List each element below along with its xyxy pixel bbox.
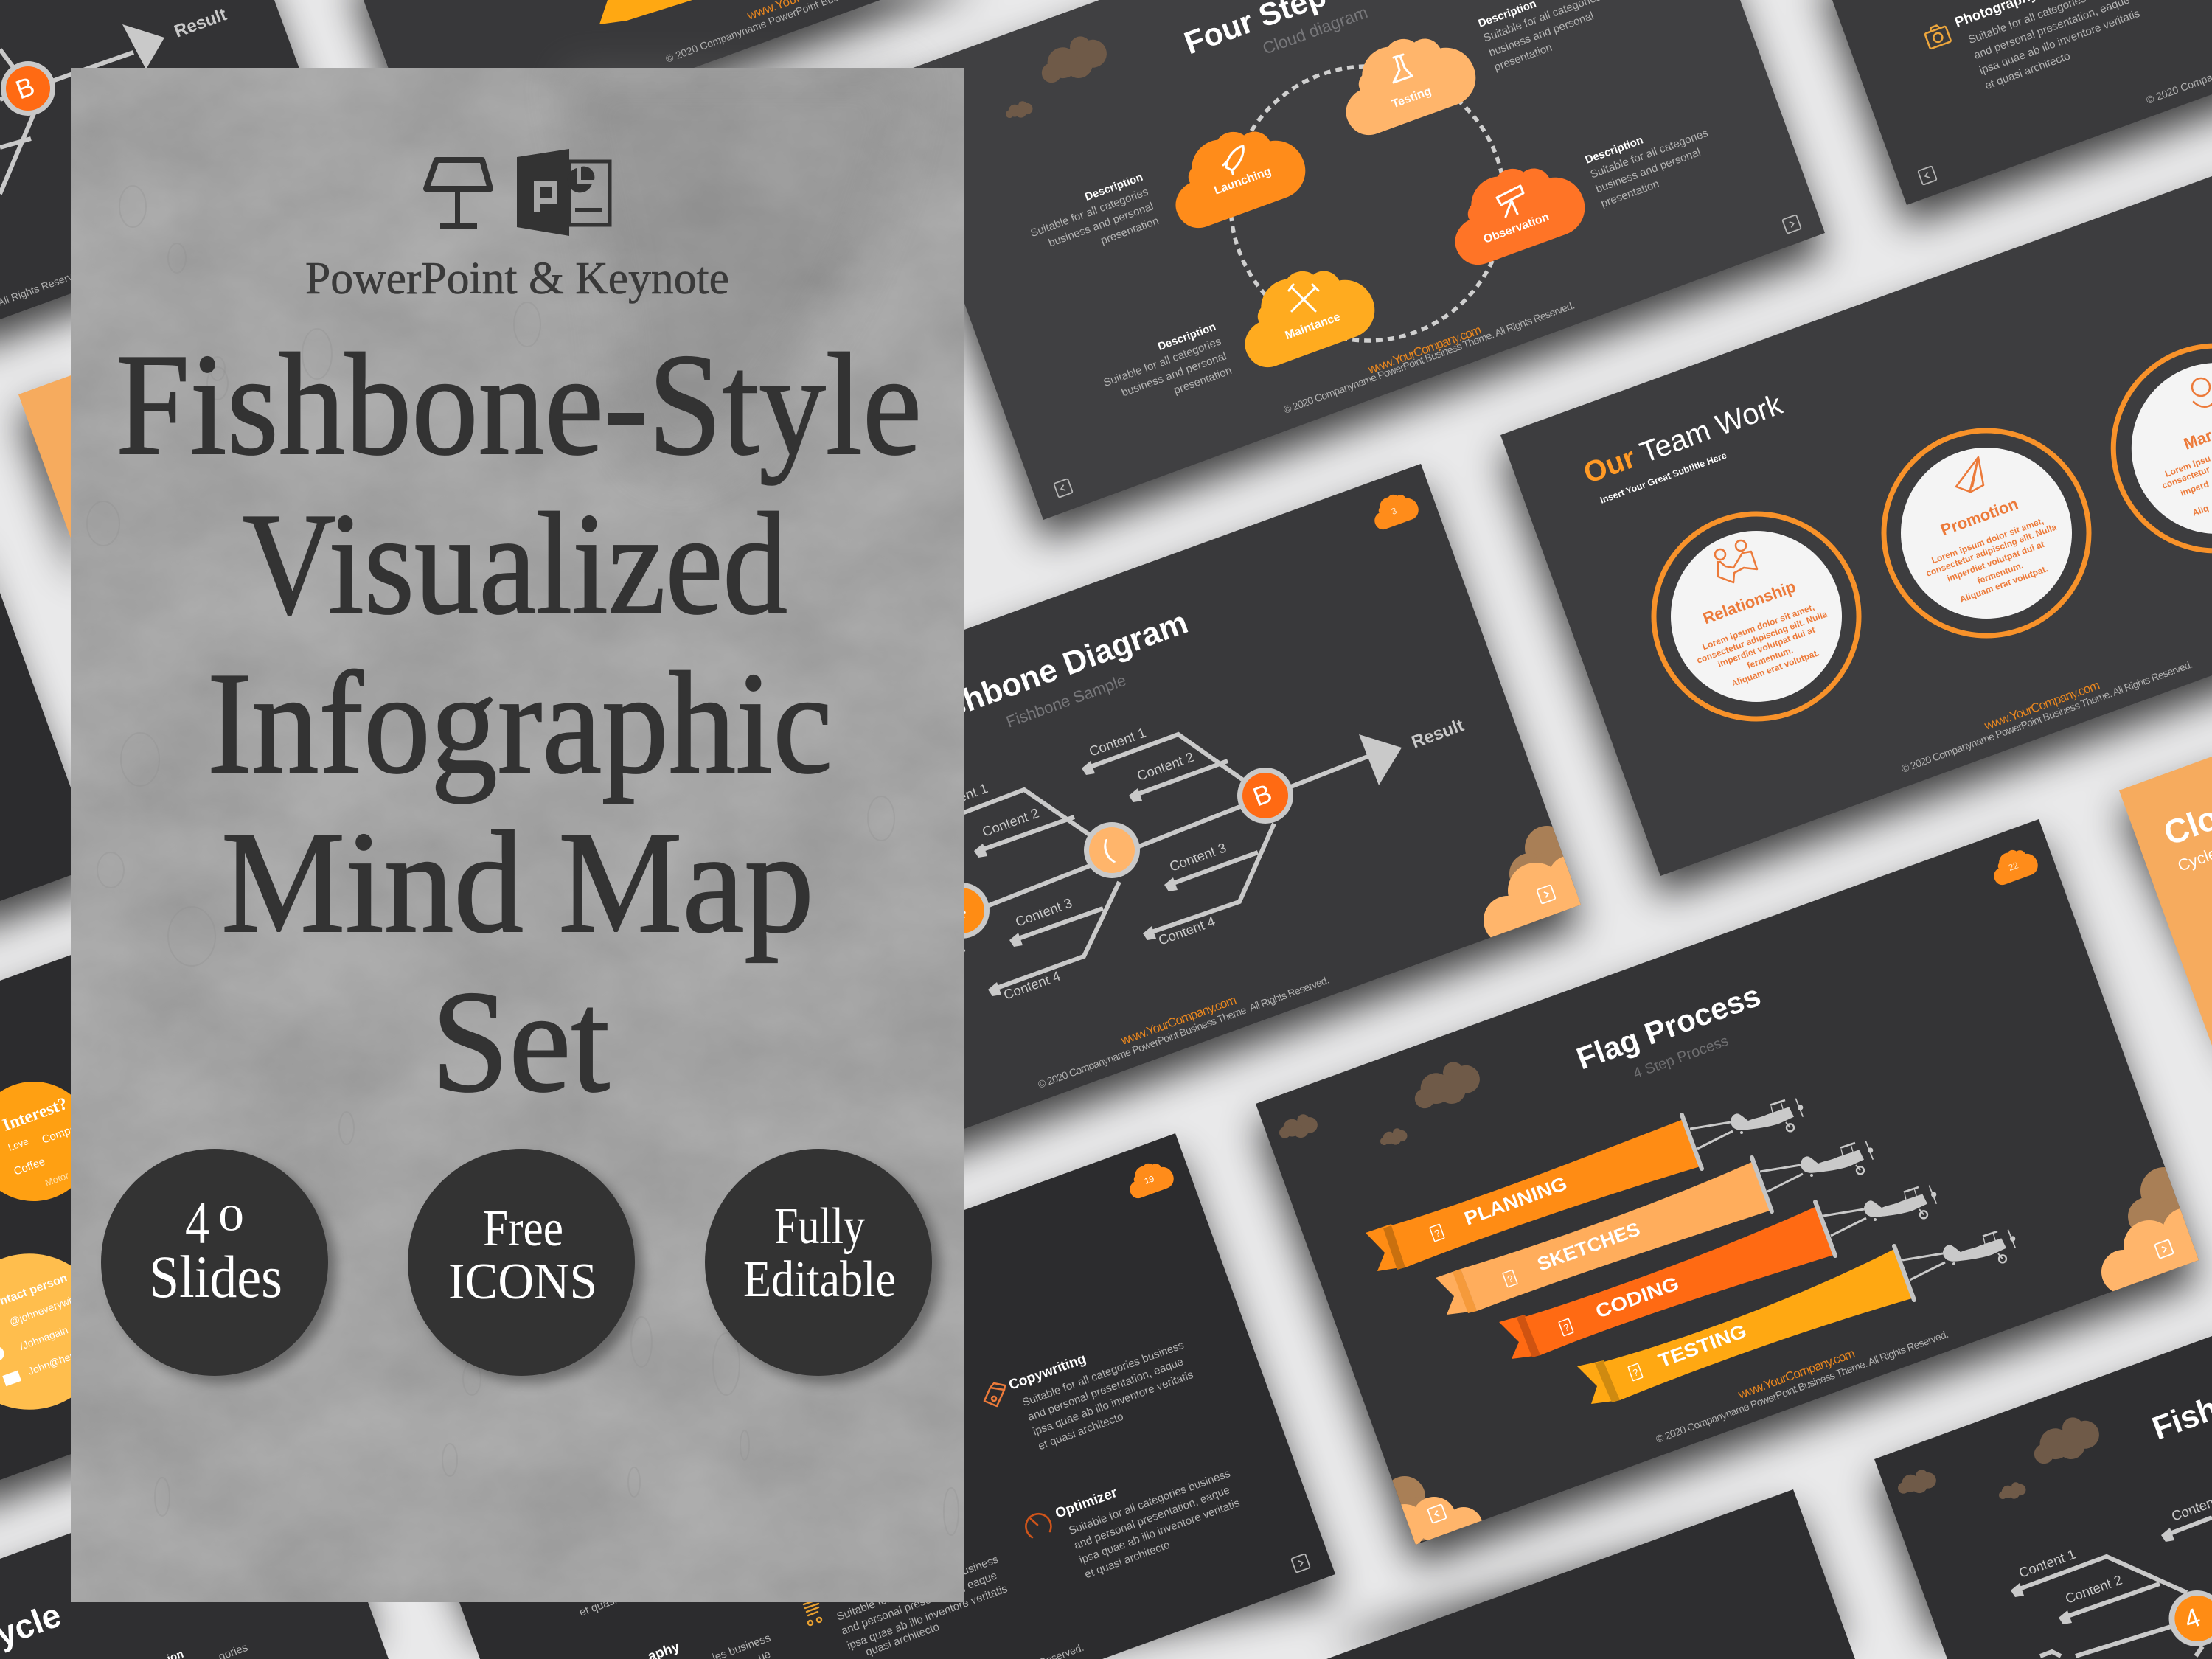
badge: Fully Editable: Fully — [774, 1198, 865, 1255]
description: Observation — [1584, 112, 1720, 210]
node C — [1084, 822, 1140, 878]
branches — [929, 734, 1274, 989]
description: Observation: presentation — [1599, 178, 1660, 210]
node 4: 4 — [2180, 1601, 2205, 1635]
panel: grey marble cover — [71, 68, 964, 1602]
page number cloud: 19 — [1143, 1173, 1156, 1186]
circle: Contact person: @johneverywhere — [8, 1288, 90, 1328]
item: Optimizer: and personal presentation, eaque — [1072, 1484, 1231, 1552]
body text — [1695, 602, 1829, 689]
item: Photography — [1953, 0, 2148, 94]
footer copyright: © 2020 Companyname PowerPoint Business Theme. All Rights Reserved. — [1655, 1328, 1950, 1445]
body text: imperd — [2179, 479, 2211, 498]
item: cart description: ipsa quae ab illo inventore veritatis — [846, 1582, 1009, 1652]
title: Fishbone-Style — [116, 324, 922, 485]
circle: Interest: Company — [41, 1119, 89, 1147]
banner: Testing — [1577, 1248, 1912, 1404]
description: Testing: presentation — [1492, 41, 1554, 74]
panel: bottom-left Cycle slide — [0, 1446, 389, 1659]
circle: Interest — [0, 1082, 89, 1201]
item: Copywriting: ipsa quae ab illo inventore veritatis — [1032, 1368, 1195, 1439]
body text: Aliquam erat volutpat. — [1730, 647, 1820, 689]
body text — [2160, 453, 2212, 518]
body text: fermentum. — [1976, 560, 2025, 586]
nav button — [1291, 1554, 1310, 1573]
item: Optimizer: Optimizer — [1054, 1485, 1120, 1522]
node A: 4 — [946, 894, 970, 928]
item: Copywriting: et quasi architecto — [1037, 1411, 1125, 1453]
badge: 40 Slides — [101, 1149, 328, 1376]
footer url: www.YourCompany.com — [1982, 678, 2101, 733]
badge: 40 Slides: 0 — [218, 1197, 244, 1238]
item: Optimizer: Suitable for all categories business — [1067, 1467, 1232, 1537]
banner: Coding — [1499, 1206, 1834, 1359]
item: Copywriting: Copywriting — [1007, 1351, 1088, 1394]
title: Flag Process — [1572, 978, 1765, 1076]
circle: Interest: Motor — [44, 1169, 71, 1189]
footer url: www.YourCompany.com — [1736, 1346, 1857, 1402]
arrowhead — [1359, 734, 1402, 785]
fishbone diagram — [929, 715, 1467, 1003]
cloud: Testing — [1328, 18, 1484, 142]
panel: Our Team Work slide — [1500, 176, 2212, 876]
node 4 — [2169, 1590, 2212, 1646]
content labels: Content 1 — [1087, 725, 1148, 759]
biplanes — [1682, 1099, 2015, 1300]
circle: Contact person: John@here — [27, 1348, 80, 1377]
panel: Four Step cloud diagram slide — [883, 0, 1825, 520]
item: Optimizer: et quasi architecto — [1083, 1539, 1172, 1581]
footer copyright: © 2020 Companyname PowerPoint Business Theme. All Rights Reserved. — [1282, 299, 1576, 416]
subtitle: 4 Step Process — [1631, 1033, 1731, 1082]
panel: slide 19 — [392, 1133, 1335, 1659]
panel: top-left fishbone slide — [0, 0, 345, 319]
circle: Interest: Interest? — [0, 1094, 70, 1135]
body text: Aliq — [2191, 503, 2210, 518]
label: CODING — [1593, 1272, 1682, 1323]
content labels: Content 2 — [980, 805, 1041, 840]
item: Copywriting: and personal presentation, eaque — [1026, 1355, 1185, 1424]
panel: Fishbone Diagram slide — [964, 464, 1581, 1129]
label: Result: Result — [1409, 715, 1467, 753]
cloud: Observation: Observation — [1482, 211, 1551, 246]
badge: Free ICONS: Free — [483, 1200, 563, 1257]
panel: bottom-middle slide — [1326, 1489, 1855, 1659]
item: cart description — [835, 1554, 1009, 1659]
description: Observation: Suitable for all categories — [1589, 127, 1710, 181]
icon — [1503, 1270, 1517, 1287]
item: Copywriting: Suitable for all categories business — [1020, 1339, 1186, 1409]
icon: ? — [1506, 1273, 1514, 1285]
banner: Sketches — [1436, 1161, 1770, 1315]
footer copyright: © 2020 Companyname PowerPoint Business Theme. All Rights Reserved. — [1037, 973, 1331, 1091]
text: PowerPoint & Keynote: PowerPoint & Keynote — [305, 254, 729, 304]
title — [116, 324, 922, 1122]
label: Relationship — [1700, 577, 1798, 627]
circle: Contact person: /Johnagain — [18, 1324, 69, 1352]
badge: 40 Slides: Slides — [149, 1243, 282, 1310]
marble bubbles — [87, 186, 959, 1535]
nav button — [1537, 885, 1556, 904]
circle: Contact person: ntact person — [0, 1272, 69, 1308]
icon: paper plane — [1956, 457, 1983, 492]
nav button — [1918, 166, 1937, 185]
dashed circle — [1231, 66, 1505, 341]
description: Observation: business and personal — [1594, 146, 1703, 195]
label: SKETCHES — [1534, 1218, 1643, 1276]
item: Photography fragment: et quasi — [578, 1594, 619, 1619]
content labels: Content 4 — [1001, 968, 1062, 1003]
node B — [1237, 768, 1293, 824]
description: Maintance: Suitable for all categories — [1102, 335, 1223, 389]
label: TESTING — [1655, 1320, 1750, 1372]
description: Launching: business and personal — [1047, 200, 1155, 250]
icon — [1559, 1318, 1573, 1336]
item: cart description: Suitable for all categories business — [835, 1554, 1000, 1624]
label: Result: Result — [172, 4, 229, 42]
content labels — [2017, 1495, 2212, 1607]
description: Launching: presentation — [1099, 215, 1161, 247]
icon: camera — [1924, 23, 1951, 49]
description: Maintance: presentation — [1172, 364, 1234, 397]
circle: Contact person — [0, 1253, 90, 1410]
description: Testing: business and personal — [1487, 10, 1596, 59]
icon: Keynote lamp — [426, 160, 490, 229]
icon: handshake — [1715, 540, 1757, 582]
description: Testing — [1477, 0, 1613, 74]
icon: person — [2192, 378, 2212, 407]
body text: fermentum. — [1746, 644, 1795, 671]
badge: Free ICONS — [408, 1149, 635, 1376]
title: Mind Map — [221, 801, 814, 963]
footer url: www.YourCompany.com — [1119, 992, 1238, 1048]
body text: imperdiet volutpat dui at — [1946, 539, 2045, 584]
page number cloud — [1987, 844, 2041, 887]
description: Launching: Suitable for all categories — [1029, 186, 1150, 240]
content labels — [929, 725, 1228, 1003]
corner clouds — [1484, 826, 1581, 938]
cloud: Observation — [1437, 148, 1593, 271]
footer copyright: © 2020 Companyname PowerPoint Business Theme. All Rights Reserved. — [1900, 658, 2194, 775]
cloud: Launching: Launching — [1213, 165, 1273, 198]
cloud: Maintance: Maintance — [1284, 310, 1342, 342]
branch end markers — [2011, 1528, 2174, 1624]
body text: consectetur — [2160, 464, 2211, 491]
content labels: Content 3 — [1013, 895, 1074, 930]
badge: Fully Editable: Editable — [743, 1251, 896, 1308]
item: Optimizer: ipsa quae ab illo inventore veritatis — [1078, 1497, 1242, 1567]
node B: B — [12, 71, 38, 105]
title: Fishbone Diagram — [914, 604, 1192, 735]
badge: 40 Slides: 4 — [185, 1189, 209, 1256]
content labels: Content 4 — [1156, 914, 1217, 948]
content labels: Content 3 — [1167, 840, 1228, 874]
panel: dark left slide — [0, 593, 99, 901]
footer url: www.YourCompany.com — [1366, 322, 1484, 377]
item: cart description: and personal presentation, eaque — [840, 1569, 998, 1638]
subtitle: Fishbone Sample — [1004, 671, 1129, 731]
icon — [1430, 1224, 1444, 1242]
panel: bottom-right fishbone slide — [1874, 1336, 2212, 1659]
nav buttons — [1427, 1239, 2174, 1523]
description: Maintance: Description — [1156, 321, 1217, 353]
panel: orange right slide — [2119, 757, 2212, 1046]
label: Promotion — [1938, 494, 2020, 540]
circle: Marketing — [2113, 346, 2212, 551]
fishbone lines — [2017, 1517, 2212, 1656]
badge: Free ICONS: ICONS — [448, 1253, 597, 1310]
item: Copywriting — [1007, 1318, 1201, 1455]
cloud: Launching — [1158, 111, 1313, 234]
circle: Relationship — [1654, 514, 1859, 719]
icon — [1628, 1363, 1643, 1381]
body text: Aliquam erat volutpat. — [1958, 563, 2049, 605]
body text: consectetur adipiscing elit. Nulla — [1924, 522, 2058, 579]
content labels: Content 1 — [2017, 1546, 2078, 1581]
body text: imperdiet volutpat dui at — [1717, 625, 1816, 669]
spine — [944, 755, 1371, 923]
description: Launching: Description — [1083, 171, 1144, 204]
decorative brown clouds — [1006, 33, 1110, 118]
panel: Interest and contact slide — [0, 884, 427, 1480]
item: Optimizer — [1054, 1447, 1248, 1583]
title: Visualized — [243, 483, 787, 644]
icon: pen nib — [984, 1383, 1005, 1406]
node C: ( — [1098, 834, 1116, 866]
page number cloud: 3 — [1390, 505, 1398, 517]
icon: cart — [804, 1600, 821, 1625]
circle: Interest: Coffee — [13, 1155, 47, 1178]
page number cloud — [1368, 488, 1422, 532]
item: Photography: ipsa quae ab illo inventore veritatis — [1978, 7, 2141, 77]
icon: ? — [1562, 1321, 1571, 1334]
subtitle: Cloud diagram — [1260, 2, 1370, 58]
icon: PowerPoint — [517, 149, 610, 236]
icon: gauge — [1026, 1514, 1051, 1537]
decorative brown clouds — [1898, 1414, 2102, 1499]
description: Launching — [1023, 171, 1161, 269]
banner: Planning — [1366, 1119, 1700, 1271]
description: Maintance — [1096, 321, 1234, 419]
banner fragment — [599, 0, 692, 24]
icon: ? — [1631, 1366, 1640, 1379]
title: Our Team Work — [1579, 388, 1787, 490]
cloud: Testing: Testing — [1390, 85, 1433, 111]
content labels: Content 2 — [2063, 1572, 2124, 1607]
title: Infographic — [207, 642, 832, 804]
node B — [1, 61, 55, 116]
description: Observation: Description — [1584, 134, 1645, 167]
description: Maintance: business and personal — [1120, 349, 1228, 400]
nav buttons — [1054, 215, 1801, 498]
branch end markers — [974, 761, 1178, 996]
body text: consectetur adipiscing elit. Nulla — [1695, 609, 1829, 666]
subtitle: Insert Your Great Subtitle Here — [1599, 451, 1728, 506]
decorative brown clouds — [1279, 1059, 1483, 1145]
fishbone lines — [0, 49, 133, 194]
content labels: Content 2 — [1135, 749, 1196, 784]
arrow — [122, 24, 164, 69]
circle: Promotion — [1884, 431, 2089, 636]
marble swirl — [562, 68, 913, 475]
body text — [1924, 515, 2058, 605]
corner clouds — [1382, 1167, 2210, 1548]
label: PLANNING — [1461, 1172, 1570, 1230]
body text: Lorem ipsum dolor sit amet, — [1930, 515, 2045, 566]
panel: Flag Process slide — [1256, 819, 2210, 1548]
panel: top-middle flag slide — [364, 0, 880, 166]
circle: Interest: Love — [7, 1135, 30, 1153]
icon: ? — [1433, 1227, 1441, 1239]
page number cloud: 22 — [2007, 860, 2020, 873]
body text: Lorem ipsum dolor sit amet, — [1701, 602, 1816, 652]
cloud: Maintance — [1227, 251, 1382, 374]
body text: Lorem ipsu — [2163, 453, 2212, 479]
page number cloud — [1123, 1157, 1177, 1200]
node B: B — [1249, 778, 1276, 813]
badge: Fully Editable — [705, 1149, 932, 1376]
content labels: Content 1 — [929, 780, 990, 815]
panel: orange left slide — [18, 372, 81, 566]
node A — [933, 883, 990, 939]
title: Set — [431, 961, 610, 1122]
item: Photography: et quasi architecto — [1983, 49, 2072, 92]
panel: Photography slide — [1832, 0, 2212, 205]
item: Photography fragment — [578, 1594, 772, 1659]
item: cart description: quasi architecto — [864, 1621, 941, 1659]
